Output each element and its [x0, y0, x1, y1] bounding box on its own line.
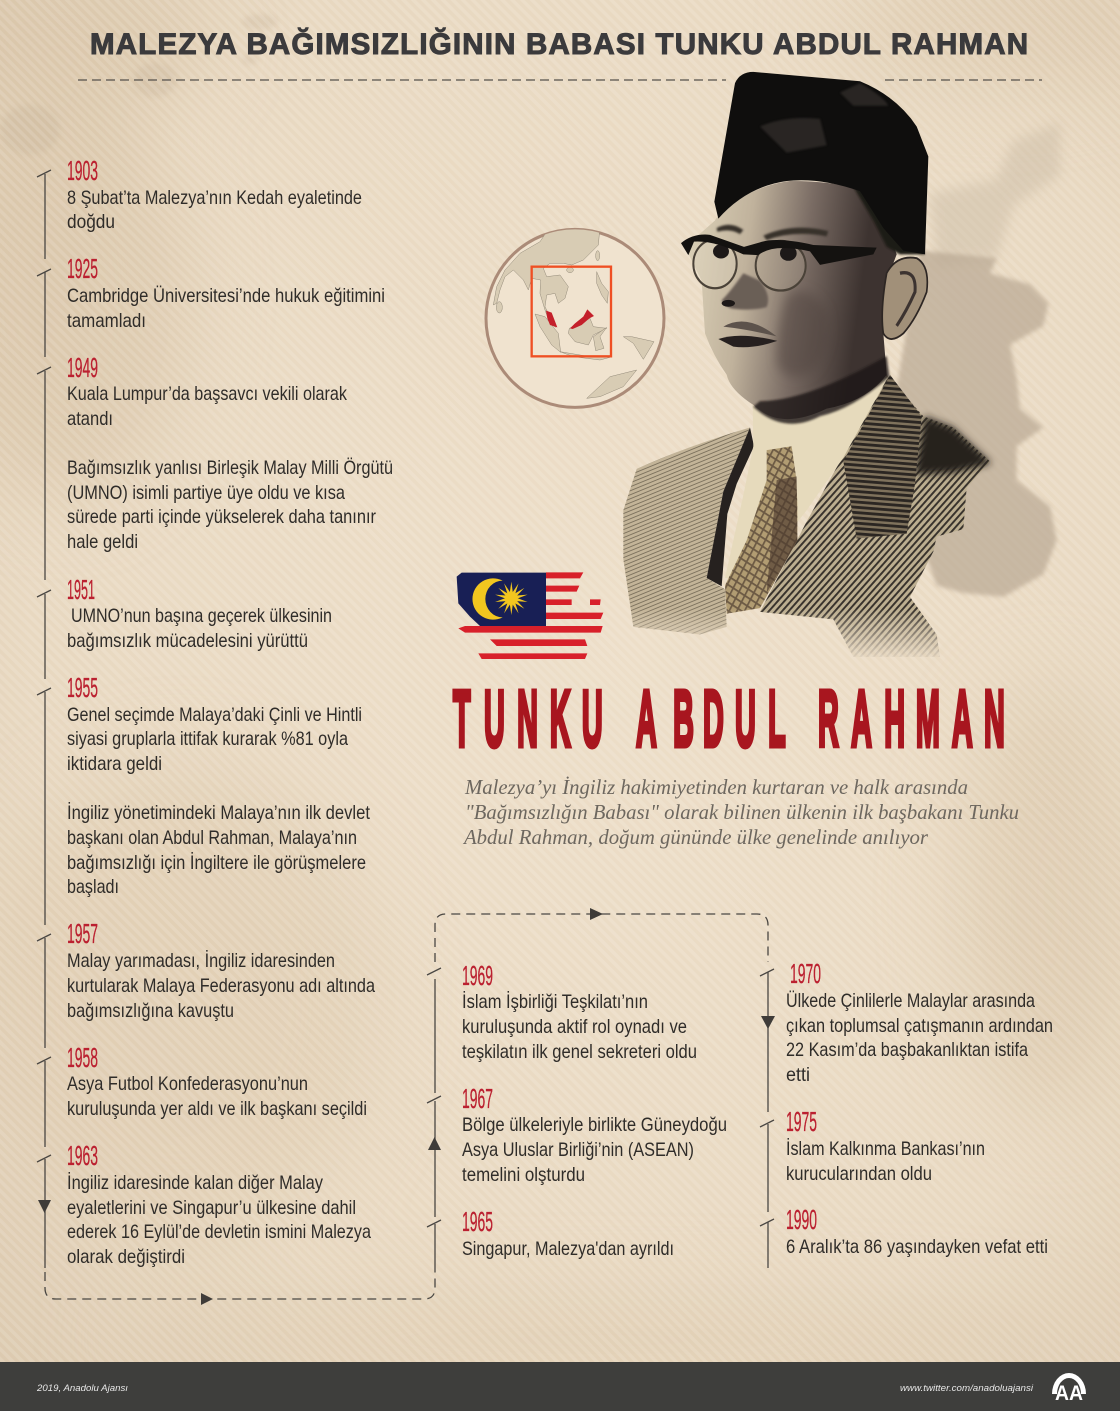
timeline entry 1963: eyaletlerini ve Singapur’u ülkesine dahil [67, 1197, 356, 1219]
timeline entry 1903 [67, 155, 362, 233]
crescent [472, 578, 503, 620]
tie [725, 446, 797, 614]
portrait of Tunku Abdul Rahman [623, 72, 1060, 657]
timeline entry 1903: doğdu [67, 211, 115, 233]
timeline entry 1970: Ülkede Çinlilerle Malaylar arasında [786, 990, 1035, 1012]
timeline entry 1975: İslam Kalkınma Bankası’nın [786, 1137, 985, 1160]
timeline entry 1949: sürede parti içinde yükselerek daha tanınır [67, 506, 376, 528]
timeline entry 1975: kurucularından oldu [786, 1163, 932, 1185]
timeline entry 1957: bağımsızlığına kavuştu [67, 1000, 234, 1022]
timeline entry 1949: atandı [67, 408, 113, 430]
intro paragraph: Abdul Rahman, doğum gününde ülke genelinde anılıyor [462, 825, 929, 849]
nose, moustache and mouth [718, 273, 777, 347]
timeline entry 1957: 1957 [67, 918, 98, 949]
timeline entry 1949: (UMNO) isimli partiye üye oldu ve kısa [67, 482, 345, 504]
timeline entry 1951 [67, 574, 332, 652]
intro paragraph: Malezya’yı İngiliz hakimiyetinden kurtaran ve halk arasında [464, 775, 968, 799]
hair [853, 187, 925, 254]
timeline entry 1965: Singapur, Malezya'dan ayrıldı [462, 1238, 674, 1260]
map land [493, 227, 654, 398]
timeline entry 1970 [786, 958, 1053, 1086]
timeline entry 1949 [67, 352, 393, 553]
timeline entry 1951: bağımsızlık mücadelesini yürüttü [67, 630, 308, 652]
timeline entry 1957: kurtularak Malaya Federasyonu adı altında [67, 975, 375, 997]
timeline entry 1967 [462, 1083, 727, 1186]
timeline entry 1969: kuruluşunda aktif rol oynadı ve [462, 1016, 687, 1038]
Malaysia highlighted [546, 309, 594, 329]
glasses [681, 235, 877, 291]
jacket [623, 375, 992, 657]
timeline entry 1951: UMNO’nun başına geçerek ülkesinin [71, 605, 332, 627]
timeline entry 1955: Genel seçimde Malaya’daki Çinli ve Hintli [67, 704, 362, 726]
timeline entry 1963 [67, 1140, 371, 1268]
timeline entry 1965: 1965 [462, 1206, 493, 1237]
timeline entry 1925: Cambridge Üniversitesi’nde hukuk eğitimini [67, 285, 385, 307]
timeline entry 1955: iktidara geldi [67, 753, 162, 775]
name heading: RAHMAN [818, 674, 1005, 763]
timeline entry 1963: olarak değiştirdi [67, 1246, 185, 1268]
timeline entry 1957: Malay yarımadası, İngiliz idaresinden [67, 949, 335, 972]
timeline entry 1990: 6 Aralık’ta 86 yaşındayken vefat etti [786, 1236, 1048, 1258]
timeline entry 1949: hale geldi [67, 531, 138, 553]
timeline entry 1963: 1963 [67, 1140, 98, 1171]
timeline entry 1955: İngiliz yönetimindeki Malaya’nın ilk devlet [67, 801, 370, 824]
icon: Anadolu Agency logo [1052, 1373, 1086, 1405]
eyebrows [717, 225, 828, 240]
timeline connector [37, 170, 775, 1305]
timeline entry 1965 [462, 1206, 674, 1260]
timeline entry 1975 [786, 1106, 985, 1185]
timeline entry 1958 [67, 1042, 367, 1120]
timeline entry 1958: kuruluşunda yer aldı ve ilk başkanı seçildi [67, 1098, 367, 1120]
timeline entry 1925: 1925 [67, 253, 98, 284]
timeline entry 1955 [67, 672, 370, 898]
timeline entry 1903: 8 Şubat’ta Malezya’nın Kedah eyaletinde [67, 187, 362, 209]
timeline entry 1951: 1951 [67, 574, 95, 605]
faint upper ink wash [930, 123, 1060, 266]
timeline entry 1958: 1958 [67, 1042, 98, 1073]
timeline entry 1990: 1990 [786, 1204, 817, 1235]
ink wash stain [887, 251, 1057, 597]
timeline entry 1958: Asya Futbol Konfederasyonu’nun [67, 1073, 308, 1095]
timeline entry 1949: Kuala Lumpur’da başsavcı vekili olarak [67, 383, 347, 405]
name heading [453, 674, 1005, 763]
intro paragraph [462, 775, 1019, 849]
intro paragraph: "Bağımsızlığın Babası" olarak bilinen ülkenin ilk başbakanı Tunku [465, 800, 1019, 824]
icon: Anadolu Agency logo: AA [1055, 1382, 1083, 1405]
arrowheads [38, 908, 775, 1305]
timeline entry 1970: etti [786, 1064, 810, 1086]
locator globe [486, 227, 664, 407]
timeline entry 1925: tamamladı [67, 310, 146, 332]
hat [714, 72, 928, 254]
title: MALEZYA BAĞIMSIZLIĞININ BABASI TUNKU ABDUL RAHMAN [90, 27, 1028, 61]
timeline entry 1949: Bağımsızlık yanlısı Birleşik Malay Milli Örgütü [67, 457, 393, 479]
timeline entry 1963: ederek 16 Eylül’de devletin ismini Malezya [67, 1221, 371, 1243]
timeline entry 1969: 1969 [462, 960, 493, 991]
timeline entry 1970: 22 Kasım’da başbakanlıktan istifa [786, 1039, 1028, 1061]
timeline entry 1970: 1970 [790, 958, 821, 989]
timeline entry 1967: temelini olşturdu [462, 1164, 585, 1186]
timeline entry 1957 [67, 918, 375, 1022]
timeline entry 1967: 1967 [462, 1083, 493, 1114]
Malaysian flag [457, 572, 603, 659]
timeline entry 1955: siyasi gruplarla ittifak kurarak %81 oyla [67, 728, 348, 750]
timeline entry 1969: teşkilatın ilk genel sekreteri oldu [462, 1041, 697, 1063]
footer bar [0, 1362, 1120, 1411]
footer credit: 2019, Anadolu Ajansı [36, 1383, 129, 1393]
face [685, 181, 897, 419]
footer url: www.twitter.com/anadoluajansi [900, 1383, 1034, 1393]
timeline entry 1963: İngiliz idaresinde kalan diğer Malay [67, 1171, 323, 1194]
focus rectangle [532, 267, 611, 356]
timeline entry 1975: 1975 [786, 1106, 817, 1137]
timeline entry 1955: başkanı olan Abdul Rahman, Malaya’nın [67, 827, 357, 849]
timeline entry 1955: başladı [67, 876, 119, 898]
timeline entry 1967: Asya Uluslar Birliği’nin (ASEAN) [462, 1139, 694, 1161]
name heading: TUNKU [453, 674, 603, 763]
collar and shirt [725, 377, 888, 578]
timeline entry 1955: 1955 [67, 672, 98, 703]
ear [882, 258, 927, 339]
timeline entry 1969 [462, 960, 697, 1063]
timeline entry 1925 [67, 253, 385, 332]
timeline entry 1969: İslam İşbirliği Teşkilatı’nın [462, 990, 648, 1013]
timeline entry 1955: bağımsızlığı için İngiltere ile görüşmelere [67, 851, 366, 874]
name heading: ABDUL [636, 674, 786, 763]
timeline entry 1903: 1903 [67, 155, 98, 186]
timeline entry 1990 [786, 1204, 1048, 1258]
timeline entry 1970: çıkan toplumsal çatışmanın ardından [786, 1015, 1053, 1037]
timeline entry 1967: Bölge ülkeleriyle birlikte Güneydoğu [462, 1114, 727, 1136]
star [495, 582, 528, 615]
timeline entry 1949: 1949 [67, 352, 98, 383]
